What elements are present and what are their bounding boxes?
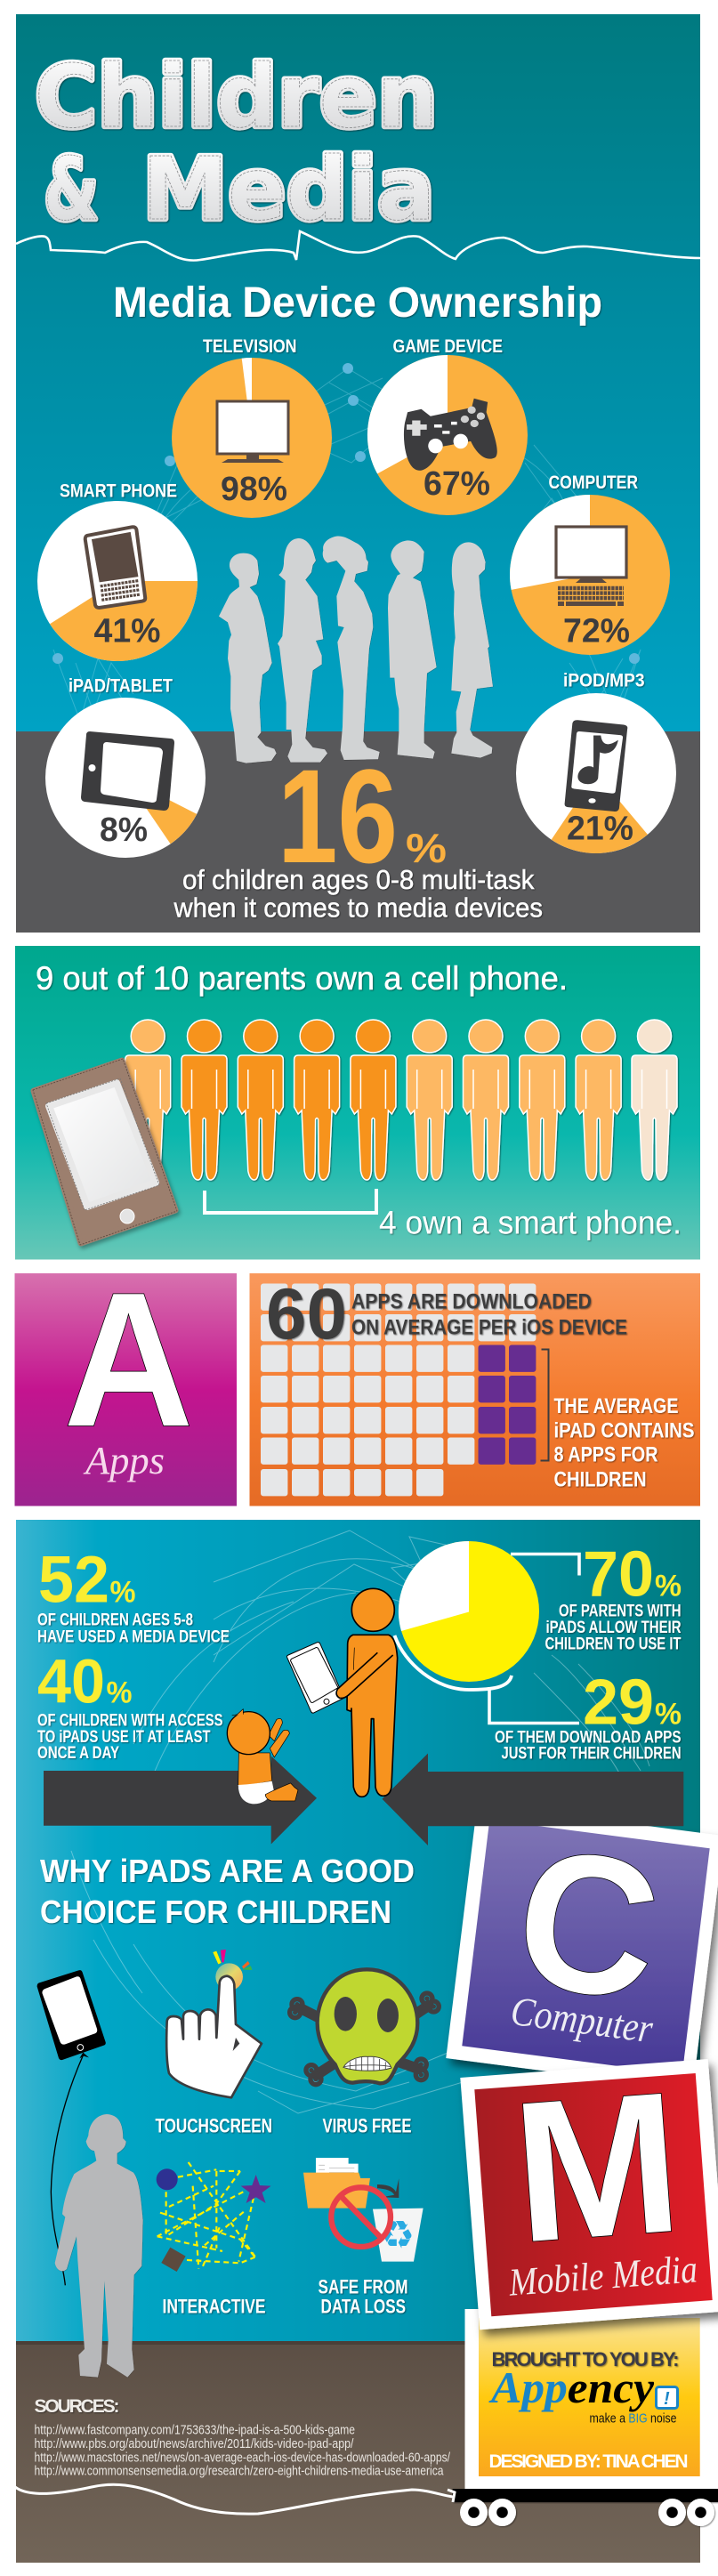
- stat: 52%: %: [110, 1575, 135, 1609]
- label: touchscreen: TOUCHSCREEN: [155, 2114, 272, 2137]
- logo: Appency: Appency: [488, 2362, 655, 2412]
- pie: ipod mp3: [516, 669, 676, 853]
- adult and tablet figure: [286, 1588, 398, 1797]
- stat: 52%: 52: [38, 1543, 109, 1616]
- logo: Appency: make a BIG noise: [589, 2411, 676, 2426]
- title: Children & Media: Children: [35, 46, 438, 147]
- heading: 9 out of 10 parents: 9 out of 10 parents own a cell phone.: [36, 960, 568, 997]
- stat: 16% multi-task: [173, 741, 543, 924]
- text: the average ipad: THE AVERAGE: [553, 1394, 678, 1418]
- title: Children & Media: Media: [142, 139, 435, 239]
- icon: touchscreen hand: [166, 1950, 262, 2097]
- title: Children & Media: &: [44, 139, 99, 239]
- label: virus free: VIRUS FREE: [322, 2114, 411, 2137]
- wagon: credits card: [452, 2309, 718, 2526]
- text: designed by: DESIGNED BY: TINA CHEN: [489, 2451, 689, 2472]
- stat: 29%: 29: [583, 1668, 654, 1739]
- card: computer: C: [504, 1806, 671, 2043]
- value: 8%: 8%: [100, 812, 148, 849]
- stat: 60 apps: [266, 1274, 627, 1354]
- icon: computer: [556, 527, 626, 606]
- value: 72%: 72%: [563, 612, 630, 650]
- text: the average ipad: iPAD CONTAINS: [553, 1418, 694, 1443]
- stat: 16% multi-task: of children ages 0-8 multi-task: [182, 864, 535, 895]
- title: Children & Media: Children: [35, 46, 438, 147]
- value: 21%: 21%: [567, 810, 633, 847]
- icon: tablet on string: [37, 1970, 106, 2285]
- pie: game device: [367, 335, 528, 515]
- bracket: eight apps: [541, 1349, 548, 1461]
- value: 67%: 67%: [424, 465, 490, 503]
- label: ipad tablet: iPAD/TABLET: [69, 674, 173, 696]
- label: interactive: INTERACTIVE: [162, 2296, 265, 2317]
- panel: 60 apps grid: [249, 1273, 700, 1506]
- title: Children & Media: &: [44, 139, 99, 239]
- icon: tablet: [81, 731, 174, 811]
- stat: 60 apps: ON AVERAGE PER iOS DEVICE: [351, 1315, 627, 1340]
- stat: 70%: 70: [583, 1539, 654, 1611]
- label: game device: GAME DEVICE: [393, 335, 503, 357]
- bracket: four parents: [205, 1189, 376, 1213]
- logo: Appency: !: [664, 2389, 670, 2409]
- stat: 16% multi-task: %: [406, 825, 447, 871]
- source links: http://www.commonsensemedia.org/research/zero-eight-childrens-media-use-america: [34, 2463, 444, 2479]
- stat: 40%: TO iPADS USE IT AT LEAST: [37, 1727, 211, 1747]
- card: computer: [446, 1804, 718, 2090]
- panel: apps letter A: A: [63, 1251, 194, 1466]
- stat: 16% multi-task: 16: [278, 741, 398, 891]
- text: the average ipad: 8 APPS FOR: [553, 1443, 658, 1466]
- stat: 52%: HAVE USED A MEDIA DEVICE: [37, 1627, 230, 1646]
- stat: 52%: [37, 1543, 230, 1646]
- baby figure: [227, 1709, 298, 1804]
- text: the average ipad: [553, 1394, 694, 1491]
- icon: television: [217, 401, 288, 463]
- pie: ipad tablet: [45, 674, 206, 858]
- script label: Computer: Computer: [508, 1988, 657, 2051]
- card: mobile media: M: [506, 2048, 688, 2285]
- pie: television: [172, 335, 332, 518]
- label: ipod mp3: iPOD/MP3: [563, 669, 645, 690]
- app tile grid: [261, 1283, 536, 1496]
- source links: [34, 2422, 451, 2479]
- wavy pull string: [3, 2467, 455, 2514]
- squiggle divider: [16, 231, 700, 261]
- icon: music player: [565, 720, 627, 812]
- text: 4 own a smart phone: 4 own a smart phone.: [379, 1205, 682, 1240]
- arrow: left-pointing: [383, 1753, 683, 1845]
- panel: why ipads: [16, 1520, 700, 2341]
- pie: 70% yellow: [399, 1541, 539, 1682]
- label: safe from data loss: DATA LOSS: [320, 2296, 406, 2317]
- wagon bar and wheels: [452, 2489, 718, 2526]
- pie: computer: [510, 472, 670, 655]
- arrow: right-pointing: [44, 1756, 317, 1844]
- stat: 40%: 40: [37, 1646, 105, 1716]
- children silhouettes: [219, 537, 493, 763]
- stat: 60 apps: APPS ARE DOWNLOADED: [351, 1290, 592, 1313]
- logo: Appency: [488, 2362, 678, 2426]
- value: 41%: 41%: [94, 612, 160, 650]
- stat: 70%: [545, 1539, 682, 1653]
- text: brought to you by: BROUGHT TO YOU BY:: [491, 2348, 680, 2370]
- script label: Apps: Apps: [83, 1439, 165, 1482]
- icon: smart phone: [85, 527, 145, 608]
- boy silhouette: [55, 2114, 143, 2378]
- title: Children & Media: Media: [142, 139, 435, 239]
- icon: skull and crossbones: [293, 1969, 436, 2083]
- stat: 70%: %: [655, 1570, 682, 1603]
- sources heading: SOURCES:: [34, 2396, 119, 2417]
- stat: 29%: [495, 1668, 682, 1764]
- stat: 70%: OF PARENTS WITH: [559, 1602, 682, 1621]
- heading: why ipads are a good choice: [40, 1853, 415, 1930]
- label: safe from data loss: SAFE FROM: [319, 2276, 407, 2297]
- panel: media device ownership: [16, 14, 700, 933]
- stat: 40%: %: [107, 1676, 132, 1710]
- panel: apps letter A: [14, 1251, 237, 1506]
- icon: safe from data loss: [303, 2158, 424, 2262]
- stat: 40%: [37, 1646, 222, 1763]
- floor band with sources: [16, 2341, 700, 2563]
- stat: 60 apps: 60: [266, 1274, 347, 1354]
- people row: [125, 1020, 677, 1180]
- heading: why ipads are a good choice: WHY iPADS ARE A GOOD: [40, 1853, 415, 1889]
- stat: 70%: iPADS ALLOW THEIR: [546, 1618, 682, 1637]
- stat: 40%: OF CHILDREN WITH ACCESS: [37, 1710, 222, 1730]
- text: the average ipad: CHILDREN: [553, 1468, 646, 1491]
- source links: http://www.fastcompany.com/1753633/the-ipad-is-a-500-kids-game: [34, 2422, 355, 2438]
- stat: 40%: ONCE A DAY: [37, 1743, 119, 1763]
- stat: 29%: %: [655, 1698, 682, 1732]
- title: Children & Media: [35, 46, 438, 239]
- label: television: TELEVISION: [203, 335, 297, 357]
- heading: Media Device Ownership: Media Device Ownership: [113, 279, 602, 327]
- label: smart phone: SMART PHONE: [60, 480, 177, 502]
- panel: parents cell phones: [15, 946, 700, 1260]
- icon: game controller: [404, 399, 497, 471]
- label: safe from data loss: [319, 2276, 407, 2317]
- source links: http://www.macstories.net/news/on-average-each-ios-device-has-downloaded-60-apps/: [34, 2451, 451, 2465]
- icon: smart phone: [33, 1059, 177, 1245]
- source links: http://www.pbs.org/about/news/archive/2011/kids-video-ipad-app/: [34, 2436, 354, 2451]
- pie: smart phone: [37, 480, 198, 661]
- card: mobile media: [460, 2048, 718, 2330]
- heading: why ipads are a good choice: CHOICE FOR CHILDREN: [40, 1894, 391, 1930]
- label: computer: COMPUTER: [548, 472, 638, 493]
- brackets around pie: [395, 1554, 579, 1723]
- value: 98%: 98%: [221, 471, 287, 508]
- icon: interactive network: [157, 2162, 271, 2272]
- stat: 52%: OF CHILDREN AGES 5-8: [37, 1611, 193, 1630]
- stat: 16% multi-task: when it comes to media devices: [173, 892, 543, 924]
- icon: safe from data loss: ♻: [380, 2214, 415, 2258]
